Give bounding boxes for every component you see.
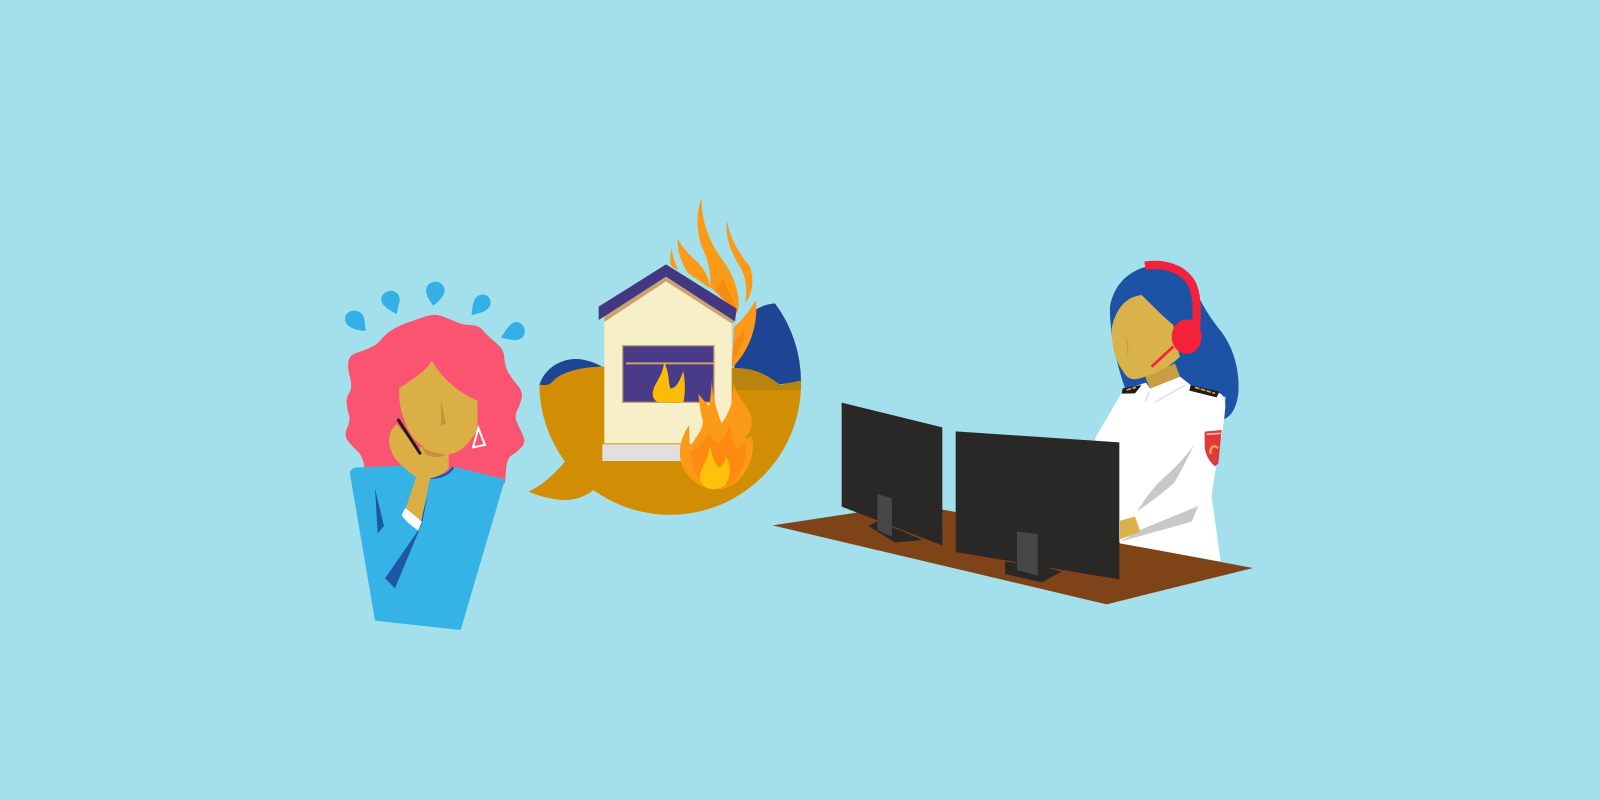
monitors	[842, 403, 1119, 582]
speech bubble with burning house	[528, 198, 801, 515]
house wall	[604, 281, 732, 443]
shirt	[350, 466, 505, 630]
fire dispatcher with headset	[1095, 265, 1239, 562]
collar	[1145, 385, 1185, 402]
hand and arm	[389, 424, 430, 521]
phone	[398, 419, 421, 454]
hair	[1110, 265, 1239, 419]
nose	[1126, 335, 1128, 357]
blue hills	[539, 303, 801, 390]
window flame	[653, 362, 685, 402]
back flames	[670, 198, 756, 368]
headset	[1145, 265, 1202, 367]
earring	[473, 428, 485, 447]
far dune shadow	[732, 368, 801, 390]
icon: sweat drops	[345, 282, 525, 340]
neck shadow	[422, 447, 447, 457]
neck	[1145, 363, 1180, 389]
large front flame	[680, 373, 753, 489]
roof	[599, 264, 737, 324]
window	[623, 346, 714, 402]
bubble body	[528, 367, 801, 515]
right monitor	[956, 431, 1119, 582]
sleeve folds	[1120, 445, 1198, 542]
house base	[602, 444, 682, 461]
face	[399, 361, 478, 454]
uniform	[1095, 377, 1225, 562]
nose	[441, 401, 446, 425]
worried woman on phone	[345, 282, 525, 630]
face	[1112, 295, 1180, 379]
shirt neckline and folds	[375, 467, 453, 588]
shirt cuff	[402, 508, 422, 531]
left monitor	[842, 403, 942, 545]
epaulettes	[1122, 385, 1219, 397]
hand	[1120, 517, 1140, 539]
desk with monitors	[773, 504, 1253, 604]
neck	[417, 447, 449, 478]
hair	[346, 315, 524, 483]
sleeve badge	[1205, 430, 1222, 466]
desk	[773, 504, 1253, 604]
